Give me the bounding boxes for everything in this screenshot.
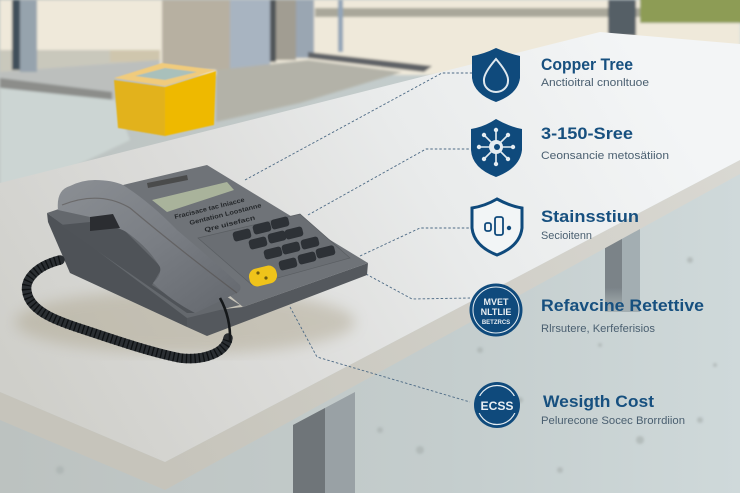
handset <box>58 180 241 313</box>
phone label text: Fracisace tac lniacce <box>174 197 246 221</box>
icon: virus shield <box>471 119 522 177</box>
straight cord <box>220 298 230 342</box>
phone label text: Qre uisefacn <box>204 215 256 234</box>
heading: Copper Tree <box>541 56 633 74</box>
phone label text: Gentation Loostanne <box>189 202 263 227</box>
handset earpiece gap <box>90 214 120 231</box>
yellow button <box>247 264 279 288</box>
heading: Refavcine Retettive <box>541 297 704 315</box>
telephone <box>27 165 368 359</box>
icon: round badge: NLTLIE <box>481 307 511 317</box>
phone shadow <box>15 290 355 354</box>
dotted leader lines <box>245 73 472 402</box>
feature 2: 3-150 <box>471 119 669 177</box>
heading: Stainsstiun <box>541 208 639 226</box>
heading: 3-150-Sree <box>541 125 633 143</box>
subtext: Rlrsutere, Kerfeferisios <box>541 323 656 335</box>
heading: Wesigth Cost <box>543 393 655 411</box>
feature 1: copper <box>472 48 649 102</box>
speaker grille <box>147 175 188 188</box>
handset lower shading <box>62 198 237 293</box>
keypad <box>232 216 336 271</box>
icon: ECSS badge <box>474 382 520 428</box>
icon: ECSS badge: ECSS <box>480 399 514 413</box>
phone top face <box>123 165 368 307</box>
feature 3: stain <box>472 199 639 255</box>
icon: round badge <box>470 284 522 336</box>
cradle area <box>47 195 240 318</box>
icon: water drop shield <box>472 48 520 102</box>
table legs <box>293 222 640 493</box>
phone display <box>152 182 234 212</box>
subtext: Pelurecone Socec Brorrdiion <box>541 415 685 427</box>
coiled cord <box>27 260 228 359</box>
phone front skirt <box>187 263 368 336</box>
phone label text <box>174 197 263 234</box>
feature 4: refavcine <box>470 284 704 336</box>
keypad panel outline <box>198 214 350 285</box>
yellow box <box>114 63 216 136</box>
left lower body <box>47 213 187 327</box>
icon: round badge: MVET <box>483 297 509 307</box>
subtext: Secioitenn <box>541 230 592 242</box>
feature 5: weight cost <box>474 382 685 428</box>
subtext: Anctioitral cnonltuoe <box>541 77 649 89</box>
subtext: Ceonsancie metosätiion <box>541 150 669 162</box>
icon: round badge: BETZRCS <box>482 320 510 326</box>
icon: outlined shield <box>472 199 522 255</box>
